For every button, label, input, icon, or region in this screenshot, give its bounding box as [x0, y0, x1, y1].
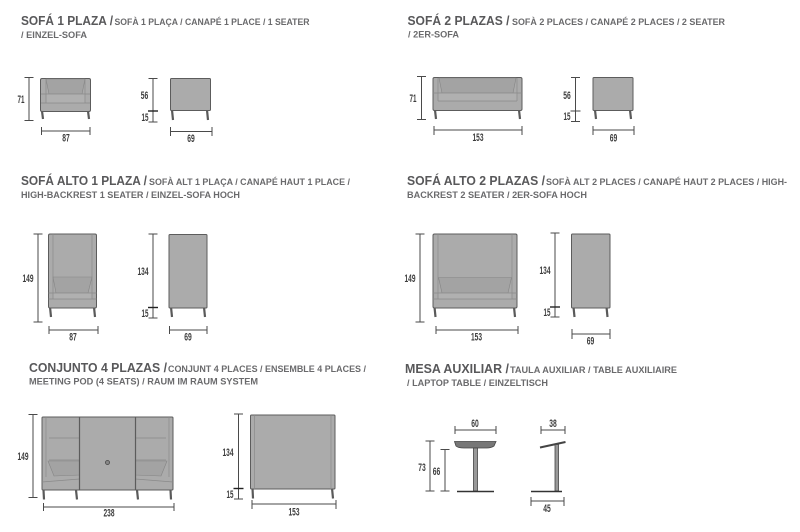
front view: sofá 1 plaza: [40, 78, 90, 119]
heading: sofá 2 plazas: / 2ER-SOFA: [408, 30, 460, 40]
front view: sofá alto 1 plaza: [48, 234, 96, 317]
dimension: width 153: 153: [472, 132, 484, 144]
heading: conjunto 4 plazas: MEETING POD (4 SEATS) / RAUM IM RAUM SYSTEM: [29, 376, 258, 386]
dimension: side heights 134 and 15: 134: [540, 265, 551, 277]
dimension: height 71: 71: [18, 94, 24, 106]
side view: sofá 2 plazas: [593, 78, 633, 119]
heading: mesa auxiliar: [405, 362, 677, 388]
dimension: height 149: [404, 234, 424, 322]
heading: sofá alto 1 plaza: SOFÀ ALT 1 PLAÇA / CANAPÉ HAUT 1 PLACE /: [149, 177, 350, 187]
heading: sofá 1 plaza: / EINZEL-SOFA: [21, 30, 87, 40]
dimension: table height 66: [433, 450, 450, 491]
front view: conjunto 4 plazas: [42, 417, 173, 500]
dimension: width 153: 153: [288, 506, 300, 518]
side view: sofá alto 2 plazas: [572, 234, 610, 317]
side view: sofá 1 plaza: [170, 78, 210, 120]
heading: mesa auxiliar: / LAPTOP TABLE / EINZELTISCH: [407, 378, 548, 388]
heading: sofá 1 plaza: SOFÁ 1 PLAZA /: [21, 13, 114, 28]
dimension: depth 69: 69: [184, 332, 192, 344]
dimension: side heights 56 and 15: [141, 78, 158, 124]
dimension: depth 69: [170, 127, 212, 145]
dimension: table height 73: 73: [418, 462, 426, 474]
dimension: side heights 56 and 15: 15: [564, 111, 570, 123]
heading: sofá alto 2 plazas: SOFÁ ALTO 2 PLAZAS /: [407, 173, 546, 188]
dimension: depth 69: [170, 326, 207, 344]
dimension: side heights 134 and 15: 15: [142, 308, 148, 320]
dimension: width 153: [434, 126, 522, 144]
heading: sofá alto 2 plazas: [407, 173, 787, 200]
heading: sofá 2 plazas: SOFÁ 2 PLAZAS /: [408, 13, 510, 28]
dimension: height 71: [410, 76, 426, 120]
heading: mesa auxiliar: TAULA AUXILIAR / TABLE AUXILIAIRE: [510, 365, 677, 375]
dimension: depth 69: 69: [587, 336, 594, 348]
dimension: table depth 38: 38: [549, 418, 557, 430]
heading: sofá alto 2 plazas: SOFÀ ALT 2 PLACES / CANAPÉ HAUT 2 PLACES / HIGH-: [546, 177, 787, 187]
dimension: table height 66: 66: [433, 466, 440, 478]
dimension: side heights 134 and 15: [138, 234, 158, 320]
dimension: side heights 134 and 15: 134: [222, 447, 234, 459]
heading: mesa auxiliar: MESA AUXILIAR /: [405, 362, 510, 376]
front view: mesa auxiliar: [454, 442, 496, 492]
dimension: depth 69: 69: [610, 132, 617, 144]
dimension: side heights 56 and 15: [563, 78, 580, 123]
dimension: height 149: 149: [404, 273, 416, 285]
dimension: base depth 45: [531, 497, 564, 515]
heading: conjunto 4 plazas: CONJUNTO 4 PLAZAS /: [29, 361, 168, 375]
dimension: side heights 56 and 15: 15: [142, 112, 148, 124]
side view: mesa auxiliar: [531, 442, 566, 492]
dimension: side heights 134 and 15: [222, 414, 244, 501]
dimension: height 149: [22, 234, 42, 322]
dimension: depth 69: [593, 126, 634, 144]
dimension: width 238: 238: [104, 508, 114, 520]
dimension: table depth 38: [541, 418, 565, 434]
dimension: side heights 134 and 15: [540, 233, 560, 319]
dimension: table height 73: [418, 441, 434, 491]
heading: conjunto 4 plazas: [29, 361, 366, 386]
dimension: table width 60: [455, 418, 496, 434]
dimension: width 153: [436, 326, 518, 344]
dimension: base depth 45: 45: [543, 503, 551, 515]
dimension: height 149: 149: [18, 451, 28, 463]
dimension: width 87: [49, 326, 98, 344]
dimension: width 153: [252, 500, 336, 518]
dimension: side heights 134 and 15: 15: [226, 489, 234, 501]
heading: sofá alto 1 plaza: SOFÁ ALTO 1 PLAZA /: [21, 173, 147, 188]
dimension: width 87: [42, 127, 90, 144]
heading: sofá alto 1 plaza: [21, 173, 350, 200]
heading: sofá alto 1 plaza: HIGH-BACKREST 1 SEATER / EINZEL-SOFA HOCH: [21, 190, 240, 200]
heading: sofá alto 2 plazas: BACKREST 2 SEATER / 2ER-SOFA HOCH: [407, 190, 587, 200]
dimension: side heights 56 and 15: 56: [141, 90, 148, 102]
dimension: height 71: [18, 78, 34, 120]
side view: conjunto 4 plazas: [250, 415, 335, 498]
dimension: depth 69: [572, 329, 610, 348]
heading: sofá 1 plaza: SOFÀ 1 PLAÇA / CANAPÉ 1 PLACE / 1 SEATER: [114, 17, 310, 27]
dimension: side heights 134 and 15: 134: [138, 266, 149, 278]
dimension: table width 60: 60: [471, 418, 479, 430]
dimension: height 149: [18, 414, 38, 498]
dimension: height 149: 149: [22, 273, 34, 285]
heading: sofá 2 plazas: SOFÀ 2 PLACES / CANAPÉ 2 PLACES / 2 SEATER: [512, 17, 725, 27]
front view: sofá 2 plazas: [433, 78, 522, 119]
dimension: side heights 134 and 15: 15: [544, 307, 550, 319]
dimension: side heights 56 and 15: 56: [563, 90, 571, 102]
heading: conjunto 4 plazas: CONJUNT 4 PLACES / ENSEMBLE 4 PLACES /: [168, 364, 366, 374]
dimension: width 238: [44, 503, 174, 520]
dimension: width 87: 87: [69, 332, 77, 344]
heading: sofá 1 plaza: [21, 13, 310, 40]
heading: sofá 2 plazas: [408, 13, 725, 40]
side view: sofá alto 1 plaza: [169, 234, 207, 317]
front view: sofá alto 2 plazas: [433, 234, 517, 317]
dimension: height 71: 71: [410, 93, 416, 105]
dimension: width 153: 153: [471, 332, 482, 344]
dimension: width 87: 87: [62, 132, 70, 144]
dimension: depth 69: 69: [187, 133, 195, 145]
